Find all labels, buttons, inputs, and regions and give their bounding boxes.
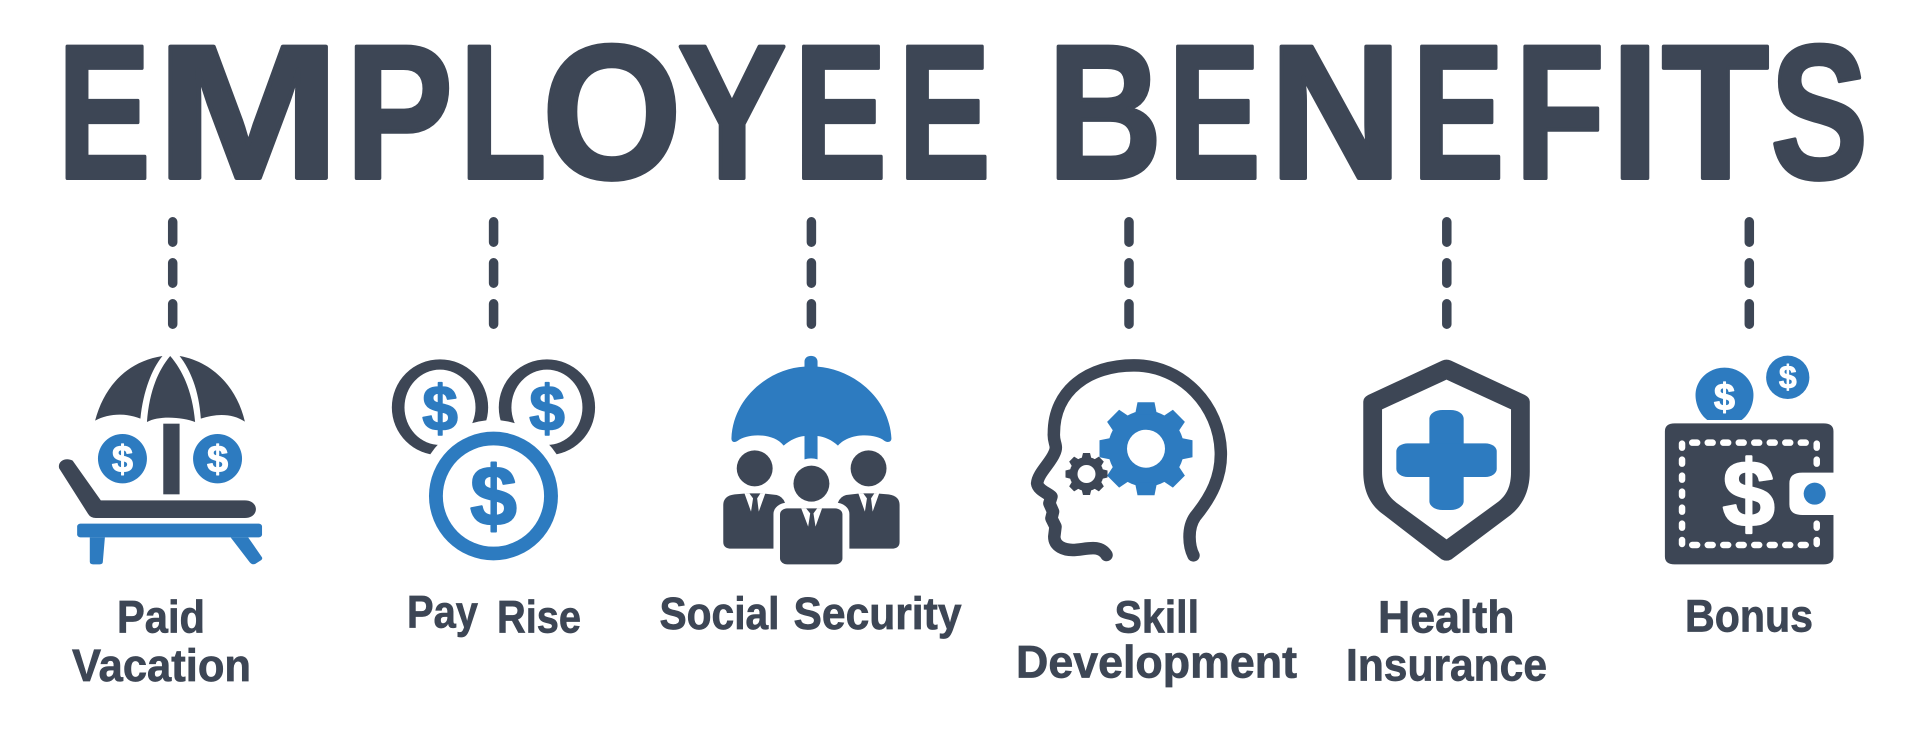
label: pay rise: Rise <box>497 592 581 643</box>
title: L <box>460 6 546 219</box>
label: social security: Security <box>794 588 962 639</box>
icon: coin dollar small: $ <box>1779 359 1797 395</box>
icon: small gear <box>1066 453 1108 495</box>
panel: bonus <box>1665 356 1833 642</box>
panel: skill development <box>1016 365 1297 687</box>
icon: dollar left: $ <box>422 372 458 444</box>
panel: pay rise <box>392 359 595 643</box>
icon: wallet with coins <box>1665 356 1833 564</box>
title: B <box>1048 6 1162 219</box>
title: N <box>1269 6 1402 219</box>
icon: wallet dollar: $ <box>1722 441 1775 546</box>
icon: dollar centre: $ <box>470 449 517 543</box>
title: F <box>1515 6 1605 219</box>
title: M <box>156 6 340 219</box>
icon: coin dollar left: $ <box>112 439 133 481</box>
panel: health insurance <box>1346 360 1547 691</box>
title: S <box>1770 6 1868 219</box>
icon: coin dollar large: $ <box>1714 377 1735 419</box>
title: I <box>1611 6 1659 219</box>
icon: three coins <box>392 359 595 572</box>
title: E <box>1412 6 1504 219</box>
label: health insurance: Health <box>1378 592 1514 643</box>
icon: umbrella over three people <box>723 356 900 566</box>
label: pay rise: Pay <box>407 587 478 638</box>
title: T <box>1662 6 1769 219</box>
label: skill development: Development <box>1016 636 1297 687</box>
label: paid vacation: Paid <box>117 592 205 643</box>
icon: dollar right: $ <box>529 372 565 444</box>
label: skill development: Skill <box>1114 592 1199 643</box>
title: Y <box>678 6 786 219</box>
title: P <box>346 6 453 219</box>
label: social security: Social <box>660 588 780 639</box>
label: health insurance: Insurance <box>1346 640 1547 691</box>
title: E <box>58 6 150 219</box>
title: E <box>898 6 990 219</box>
icon: shield with cross <box>1363 360 1530 561</box>
icon: beach umbrella and lounger <box>59 356 262 564</box>
icon: coin dollar right: $ <box>207 439 228 481</box>
icon: large gear <box>1100 402 1192 495</box>
label: paid vacation: Vacation <box>72 640 251 691</box>
panel: paid vacation <box>59 356 262 691</box>
label: bonus: Bonus <box>1685 591 1813 642</box>
title: E <box>1168 6 1261 219</box>
panel: social security <box>660 356 962 639</box>
dashed connectors <box>173 222 1749 324</box>
icon: head outline <box>1037 365 1221 555</box>
title: E <box>794 6 887 219</box>
title: O <box>542 6 682 219</box>
